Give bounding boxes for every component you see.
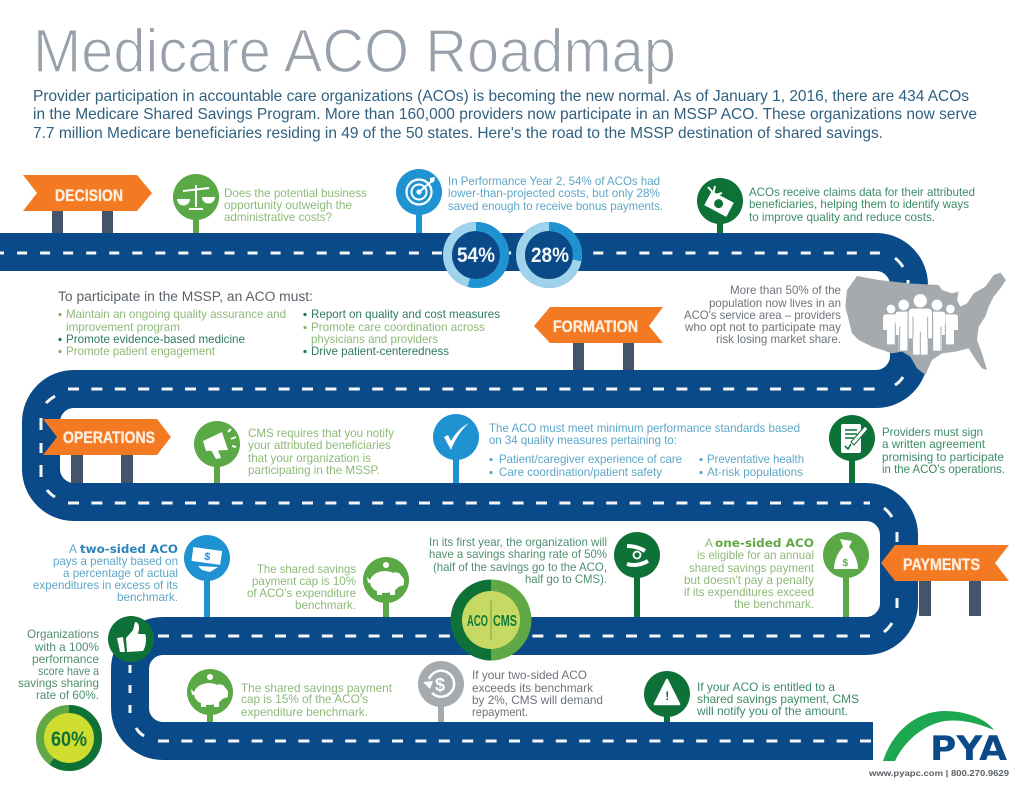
icon: warning triangle — [644, 671, 690, 722]
panel: MSSP participation requirements: Drive patient-centeredness — [311, 344, 449, 358]
text: quality measures: Preventative health — [707, 452, 804, 466]
chart: ACO and CMS split: CMS — [493, 613, 517, 630]
chart: 54% donut: 54% — [457, 244, 495, 267]
text: 15% savings cap: expenditure benchmark. — [241, 705, 368, 719]
text: one-sided ACO: if its expenditures exceed — [684, 585, 814, 599]
text: repayment demand: If your two-sided ACO — [472, 668, 587, 682]
sign: payments — [881, 545, 1009, 616]
text: two-sided ACO: a percentage of actual — [63, 566, 178, 580]
icon: piggy bank 15% — [187, 669, 233, 722]
chart: 54% donut — [443, 222, 509, 288]
text: quality measures: Patient/caregiver experience of care — [499, 452, 682, 466]
title: Medicare ACO Roadmap — [33, 17, 676, 85]
icon: piggy bank 10% — [363, 557, 409, 617]
panel: MSSP participation requirements: improvement program — [66, 320, 180, 334]
sign: decision: DECISION — [55, 186, 123, 205]
panel: MSSP participation requirements: physicians and providers — [311, 332, 438, 346]
text: one-sided ACO: is eligible for an annual — [697, 548, 814, 562]
icon: megaphone — [194, 421, 240, 483]
chart: ACO and CMS split: ACO — [467, 613, 488, 630]
text: two-sided ACO: A — [69, 542, 77, 556]
text: population in ACO service area: who opt not to participate may — [684, 320, 841, 334]
panel: MSSP participation requirements — [58, 289, 500, 358]
sign: operations: OPERATIONS — [63, 428, 155, 447]
icon: scales — [173, 174, 219, 233]
text: first-year savings sharing: have a savings sharing rate of 50% — [429, 547, 607, 561]
text: performance year 2: lower-than-projected costs, but only 28% — [448, 186, 660, 200]
text: population in ACO service area — [684, 283, 841, 346]
text: claims data — [749, 185, 975, 224]
text: quality measures: on 34 quality measures pertaining to: — [489, 433, 677, 447]
text: written agreement: promising to participate — [882, 450, 1004, 464]
text: two-sided ACO — [33, 542, 178, 604]
panel: MSSP participation requirements: Promote care coordination across — [311, 320, 485, 334]
chart: 60% donut: 60% — [51, 728, 87, 751]
chart: 28% donut: 28% — [531, 244, 569, 267]
text: repayment demand — [472, 668, 603, 719]
sign: decision — [23, 175, 152, 233]
intro paragraph — [33, 88, 977, 142]
text: business opportunity question: Does the potential business — [224, 186, 367, 200]
icon: dollar repayment: $ — [435, 675, 445, 695]
text: 15% savings cap — [241, 681, 393, 719]
text: 10% savings cap: The shared savings — [257, 562, 356, 576]
text: population in ACO service area: population now lives in an — [709, 296, 841, 310]
sign: formation: FORMATION — [553, 317, 638, 336]
icon: warning triangle: ! — [665, 689, 669, 703]
text: first-year savings sharing: (half of the savings go to the ACO, — [433, 560, 607, 574]
text: 100% performance score: Organizations — [27, 627, 99, 641]
logo: PYA: PYA — [930, 729, 1008, 769]
text: business opportunity question: administrative costs? — [224, 210, 332, 224]
icon: dollar repayment — [418, 661, 464, 722]
icon: US map with people — [845, 273, 1006, 375]
text: claims data: to improve quality and reduce costs. — [749, 210, 935, 224]
text: payment notification: shared savings payment, CMS — [697, 692, 859, 706]
text: 100% performance score — [18, 627, 99, 702]
text: business opportunity question: opportunity outweigh the — [224, 198, 352, 212]
chart: 28% donut — [516, 222, 582, 288]
text: one-sided ACO — [684, 536, 815, 611]
icon: target — [396, 169, 442, 233]
text: two-sided ACO: pays a penalty based on — [53, 554, 178, 568]
text: CMS notification — [248, 426, 394, 477]
panel: MSSP participation requirements: Promote evidence-based medicine — [66, 332, 245, 346]
icon: signed document — [829, 415, 875, 483]
text: population in ACO service area: More than 50% of the — [730, 283, 841, 297]
text: two-sided ACO: benchmark. — [117, 590, 178, 604]
text: population in ACO service area: ACO's service area – providers — [684, 308, 841, 322]
text: claims data: beneficiaries, helping them to identify ways — [749, 197, 969, 211]
text: one-sided ACO: but doesn't pay a penalty — [684, 573, 814, 587]
text: business opportunity question — [224, 186, 367, 224]
text: first-year savings sharing: half go to CMS). — [525, 572, 607, 586]
text: claims data: ACOs receive claims data for their attributed — [749, 185, 975, 199]
text: CMS notification: CMS requires that you notify — [248, 426, 394, 440]
chart: 60% donut — [40, 709, 98, 767]
text: one-sided ACO: shared savings payment — [689, 561, 815, 575]
intro paragraph: in the Medicare Shared Savings Program. More than 160,000 providers now participate in an MSSP ACO. These organizations now serve — [33, 106, 977, 123]
text: repayment demand: repayment. — [472, 705, 528, 719]
text: population in ACO service area: risk losing market share. — [716, 332, 841, 346]
text: written agreement: Providers must sign — [882, 425, 983, 439]
text: website and phone: www.pyapc.com | 800.270.9629 — [868, 768, 1009, 778]
intro paragraph: Provider participation in accountable care organizations (ACOs) is becoming the new normal. As of January 1, 2016, there are 434 ACOs — [33, 88, 969, 105]
icon: thumbs up — [108, 616, 154, 662]
text: one-sided ACO: one-sided ACO — [715, 536, 814, 550]
text: written agreement: a written agreement — [882, 437, 986, 451]
text: written agreement — [882, 425, 1005, 476]
text: two-sided ACO: two-sided ACO — [80, 542, 178, 556]
text: one-sided ACO: A — [705, 536, 713, 550]
text: performance year 2 — [448, 174, 663, 213]
text: 100% performance score: performance — [32, 652, 99, 666]
text: 10% savings cap: payment cap is 10% — [252, 574, 356, 588]
panel: MSSP participation requirements: To participate in the MSSP, an ACO must: — [58, 289, 313, 304]
panel: MSSP participation requirements: Promote patient engagement — [66, 344, 216, 358]
panel: MSSP participation requirements: Maintain an ongoing quality assurance and — [66, 307, 286, 321]
text: written agreement: in the ACO's operations. — [882, 462, 1005, 476]
text: 10% savings cap: of ACO's expenditure — [247, 586, 356, 600]
text: quality measures: Care coordination/patient safety — [499, 465, 662, 479]
text: quality measures — [489, 421, 804, 479]
text: 15% savings cap: The shared savings payment — [241, 681, 393, 695]
text: repayment demand: by 2%, CMS will demand — [472, 693, 603, 707]
icon: money bag: $ — [842, 558, 848, 569]
text: 100% performance score: rate of 60%. — [36, 688, 99, 702]
text: two-sided ACO: expenditures in excess of its — [33, 578, 178, 592]
sign: payments: PAYMENTS — [903, 555, 980, 574]
icon: hands with coin — [614, 532, 660, 617]
text: one-sided ACO: the benchmark. — [734, 597, 814, 611]
icon: money bag — [823, 532, 869, 617]
text: CMS notification: your attributed beneficiaries — [248, 438, 391, 452]
intro paragraph: 7.7 million Medicare beneficiaries residing in 49 of the 50 states. Here's the road to the MSSP destination of shared savings. — [33, 125, 883, 142]
text: performance year 2: saved enough to receive bonus payments. — [448, 199, 663, 213]
text: payment notification: will notify you of the amount. — [696, 704, 848, 718]
icon: cash bills: $ — [203, 551, 211, 563]
road — [0, 252, 909, 741]
text: quality measures: The ACO must meet minimum performance standards based — [489, 421, 800, 435]
text: first-year savings sharing: In its first year, the organization will — [429, 535, 607, 549]
text: quality measures: At-risk populations — [707, 465, 803, 479]
text: 10% savings cap — [247, 562, 356, 612]
text: 100% performance score: score have a — [38, 664, 99, 678]
icon: claims data — [697, 178, 743, 233]
text: CMS notification: participating in the MSSP. — [248, 463, 380, 477]
sign: operations — [43, 419, 171, 483]
text: 100% performance score: with a 100% — [34, 640, 99, 654]
icon: cash bills — [184, 535, 230, 617]
logo: PYA — [883, 711, 1008, 769]
sign: formation — [534, 307, 663, 370]
text: CMS notification: that your organization is — [248, 451, 371, 465]
text: 10% savings cap: benchmark. — [295, 598, 356, 612]
text: first-year savings sharing — [429, 535, 607, 586]
text: payment notification — [696, 680, 859, 718]
text: 100% performance score: savings sharing — [18, 676, 99, 690]
icon: check mark — [433, 414, 479, 483]
text: 15% savings cap: cap is 15% of the ACO's — [241, 692, 368, 706]
panel: MSSP participation requirements: Report on quality and cost measures — [311, 307, 500, 321]
text: performance year 2: In Performance Year 2, 54% of ACOs had — [448, 174, 660, 188]
chart: ACO and CMS split — [451, 580, 531, 660]
text: repayment demand: exceeds its benchmark — [472, 681, 593, 695]
text: payment notification: If your ACO is entitled to a — [697, 680, 835, 694]
